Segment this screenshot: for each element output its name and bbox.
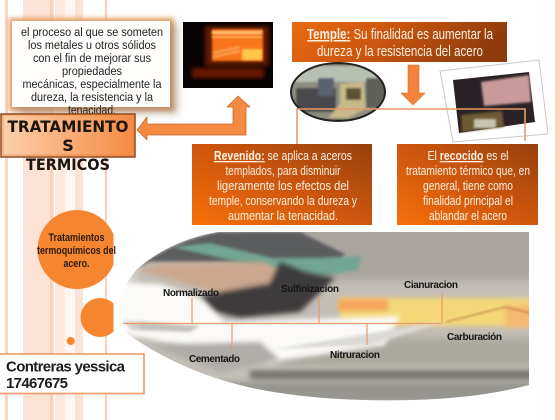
panel: Temple: dureza y la resistencia del acero [317,43,483,60]
panel: definition text box: mecánicas, especialmente la [22,77,162,91]
panel: Recocido [397,144,538,225]
panel: definition text box: tenacidad. [68,103,116,117]
process labels [163,280,502,365]
panel: Revenido: aumentar la tenacidad. [228,208,338,223]
image: welding photo with process diagram [122,232,529,400]
panel: definition text box: propiedades [62,64,122,78]
connector lines [297,109,525,144]
callout: thermochemical circle: termoquímicos del [37,245,116,257]
image: workshop oval [290,62,386,122]
image: tilted photo [440,60,548,142]
panel: Temple: Temple: Su finalidad es aumentar la [307,26,494,43]
panel: main title: TRATAMIENTO [8,117,128,136]
callout: thermochemical circle [37,210,116,289]
panel: author box: Contreras yessica [6,358,126,376]
panel: Recocido: ablandar el acero [429,208,507,223]
panel: Revenido: ligeramente los efectos del [217,178,349,193]
panel: main title [1,114,135,174]
silver suit [100,282,400,362]
panel: Revenido: temple, conservando la dureza y [209,193,357,208]
panel: definition text box: los metales u otros sólidos [28,38,156,52]
panel: author box [0,354,144,394]
worker helmet and face [139,232,346,268]
process labels: Carburación [447,332,502,343]
callout: thermochemical circle: Tratamientos [48,232,104,244]
process labels: Nitruracion [330,350,380,361]
process tree lines [123,293,442,350]
process labels: Normalizado [163,288,219,299]
panel: Recocido: general, tiene como [423,178,513,193]
image: furnace [183,22,273,88]
panel: definition text box: con el fin de mejorar sus [33,51,151,65]
arrow: down arrow [401,65,425,105]
panel: main title: S [62,136,74,155]
panel: Recocido: El recocido es el [428,148,509,163]
process labels: Cianuracion [404,280,458,291]
panel: definition text box [9,18,178,117]
panel: Temple [292,22,507,62]
arrow: double-headed elbow arrow [137,96,250,140]
panel: Revenido: Revenido: se aplica a aceros [214,148,352,163]
panel: Revenido [192,144,372,225]
process labels: Sulfinizacion [281,284,339,295]
panel: author box: 17467675 [6,375,68,392]
panel: definition text box: el proceso al que se someten [21,25,163,39]
panel: Revenido: templados, para disminuir [226,163,341,178]
panel: main title: TERMICOS [26,155,110,174]
panel: Recocido: finalidad principal el [423,193,513,208]
process labels: Cementado [189,354,240,365]
decorative circles [66,298,114,345]
panel: definition text box: dureza, la resistencia y la [31,90,153,104]
callout: thermochemical circle: acero. [64,258,90,270]
panel: Recocido: tratamiento térmico que, en [406,163,530,178]
